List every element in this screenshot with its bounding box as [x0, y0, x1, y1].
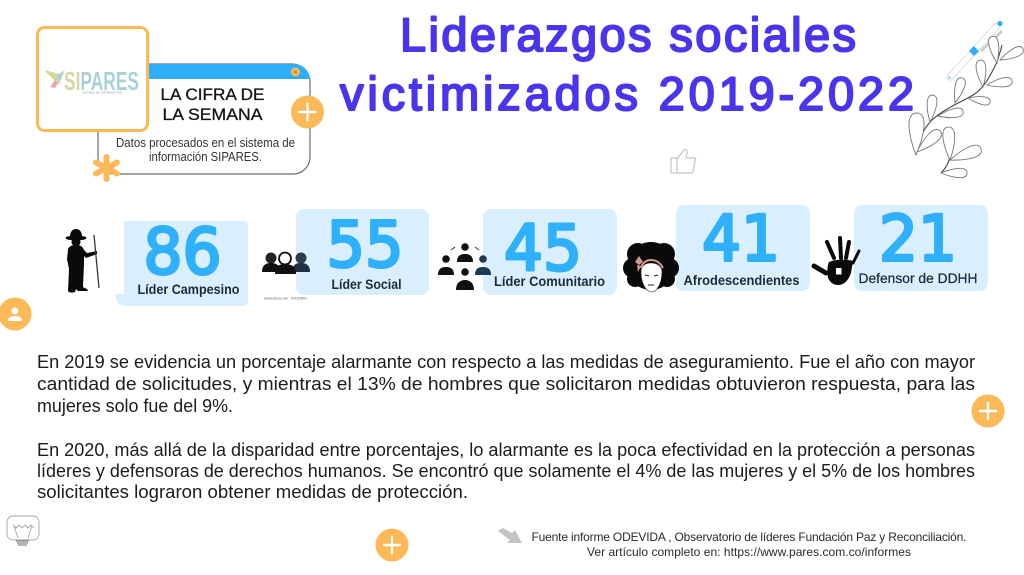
icon: orange user badge	[0, 298, 32, 330]
source note	[532, 530, 966, 559]
title: victimizados 2019-2022	[340, 67, 914, 120]
panel heading	[160, 85, 264, 124]
icon: farmer silhouette	[66, 229, 99, 293]
icon: pen	[948, 21, 1003, 78]
logo tagline: SISTEMA DE INFORMACIÓN	[82, 90, 122, 94]
logo wordmark: SIPARES	[64, 66, 139, 96]
icon: light bulb	[7, 516, 39, 545]
icon: grey arrow	[498, 528, 522, 543]
number: 41	[702, 202, 780, 276]
label: Líder Campesino	[138, 281, 240, 297]
icon: three people	[262, 252, 310, 274]
stock caption: shutterstock.com · 679328501	[264, 296, 307, 300]
logo frame	[38, 28, 148, 130]
number: 55	[326, 208, 404, 282]
text block: 2020	[37, 439, 975, 502]
card background	[676, 205, 810, 291]
panel window frame	[98, 64, 310, 174]
text block: 2019	[37, 351, 975, 416]
text block: 2019: cantidad de solicitudes, y mientras el 13% de hombres que solicitaron medidas obtuvieron respuesta, para las	[37, 373, 975, 394]
source note: Ver artículo completo en: https://www.pares.com.co/informes	[587, 545, 911, 559]
number: 86	[144, 216, 222, 288]
window close dot	[291, 68, 300, 76]
stat card: Defensor de DDHH	[854, 202, 988, 291]
title	[340, 8, 914, 120]
panel description	[116, 136, 295, 164]
text block: 2019: En 2019 se evidencia un porcentaje alarmante con respecto a las medidas de aseguramiento. Fue el año con mayor	[37, 351, 975, 372]
card background	[483, 209, 617, 295]
stat card: Líder Social	[296, 208, 429, 295]
icon: leaf branch	[909, 36, 1024, 178]
logo bird mark	[44, 70, 65, 88]
panel: la cifra de la semana	[96, 64, 324, 179]
panel description: Datos procesados en el sistema de	[116, 136, 295, 150]
icon: afro woman	[623, 242, 679, 292]
icon: community group	[438, 243, 491, 290]
label: Líder Comunitario	[494, 273, 605, 289]
text block: 2020: solicitantes lograron obtener medidas de protección.	[37, 481, 468, 502]
panel description: información SIPARES.	[149, 150, 262, 164]
icon: thumbs up	[671, 150, 696, 173]
icon: plus badge	[291, 96, 324, 128]
stat card: Líder Comunitario	[483, 209, 617, 295]
card background	[116, 221, 248, 306]
icon: plus badge right	[972, 394, 1004, 428]
icon: plus badge bottom	[376, 528, 408, 562]
label: Afrodescendientes	[684, 272, 800, 288]
panel heading: LA SEMANA	[162, 105, 263, 124]
stat card: Afrodescendientes	[676, 202, 810, 291]
text block: 2020: líderes y defensoras de derechos humanos. Se encontró que solamente el 4% de las mujeres y el 5% de los hombres	[37, 460, 975, 481]
label: Defensor de DDHH	[858, 270, 978, 286]
panel blue title bar	[140, 64, 310, 79]
card background	[296, 209, 429, 295]
label: Líder Social	[332, 276, 402, 292]
title: Liderazgos sociales	[400, 8, 856, 61]
card background	[854, 205, 988, 291]
number: 21	[879, 202, 957, 276]
panel heading: LA CIFRA DE	[160, 85, 264, 104]
icon: black hand	[814, 238, 859, 285]
text block: 2020: En 2020, más allá de la disparidad entre porcentajes, lo alarmante es la poca efectividad en la protección a personas	[37, 439, 975, 460]
number: 45	[504, 212, 582, 285]
logo: SIPARES	[38, 28, 148, 130]
text block: 2019: mujeres solo fue del 9%.	[37, 395, 233, 416]
source note: Fuente informe ODEVIDA , Observatorio de líderes Fundación Paz y Reconciliación.	[532, 530, 966, 544]
stat card: Líder Campesino	[116, 216, 248, 306]
icon: asterisk	[96, 157, 117, 179]
